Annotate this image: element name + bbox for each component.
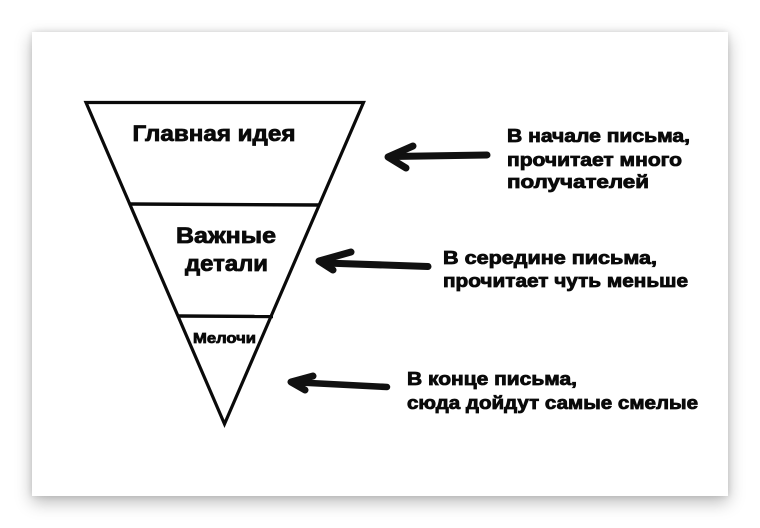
heading: main idea: Главная идея (132, 121, 296, 146)
caption: bottom (407, 369, 698, 413)
arrow: middle (319, 252, 428, 270)
caption: bottom: В конце письма, (407, 369, 577, 389)
caption: top (507, 126, 690, 192)
heading: small details: Мелочи (193, 330, 256, 347)
inverted pyramid (86, 102, 364, 424)
caption: top: получателей (507, 172, 649, 192)
caption: bottom: сюда дойдут самые смелые (407, 393, 698, 413)
arrow: bottom (291, 376, 387, 390)
heading: important details: детали (185, 251, 268, 276)
arrow: top (388, 146, 487, 168)
caption: middle: прочитает чуть меньше (443, 271, 688, 291)
caption: top: прочитает много (507, 150, 682, 170)
heading: important details: Важные (176, 223, 276, 248)
caption: top: В начале письма, (507, 126, 690, 146)
heading: important details (176, 223, 276, 276)
caption: middle: В середине письма, (443, 248, 657, 268)
caption: middle (443, 248, 688, 291)
